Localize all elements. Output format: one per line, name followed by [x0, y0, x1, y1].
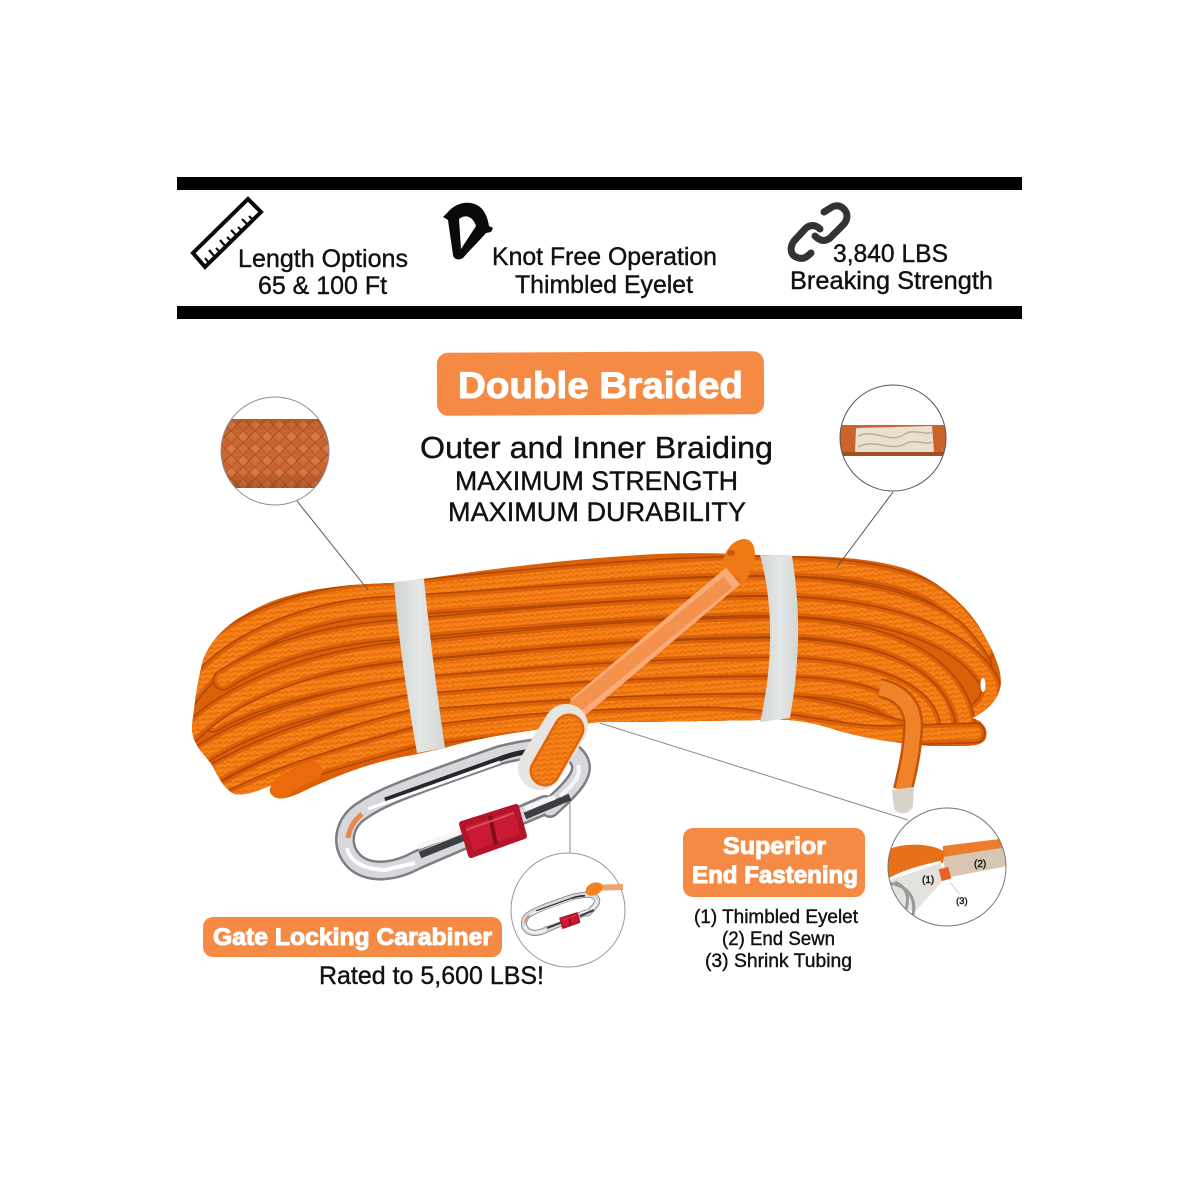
badge: double braided: Double Braided [458, 365, 743, 406]
bottom black bar [177, 306, 1022, 319]
text: braiding description: Outer and Inner Braiding [420, 430, 773, 465]
text: braiding description: MAXIMUM DURABILITY [448, 497, 746, 527]
text: end fastening list [694, 907, 859, 972]
top black bar [177, 177, 1022, 190]
text: braiding description [420, 430, 773, 527]
feature text: breaking strength [790, 240, 993, 295]
callout: end fastening close-up: (1) [922, 875, 934, 886]
icon: ruler [193, 199, 261, 267]
badge: gate locking carabiner [203, 917, 502, 957]
badge: superior end fastening: End Fastening [692, 862, 858, 889]
thimbled eyelet and rope end [540, 539, 755, 771]
rope coil [178, 553, 1001, 803]
feature text: breaking strength: 3,840 LBS [833, 240, 948, 268]
text: end fastening list: (1) Thimbled Eyelet [694, 907, 859, 928]
badge: superior end fastening: Superior [723, 833, 826, 860]
retaining band: right [760, 555, 798, 722]
icon: thimble [443, 203, 493, 259]
feature text: breaking strength: Breaking Strength [790, 267, 993, 295]
feature text: knot free: Knot Free Operation [492, 243, 717, 271]
rope tail with tip [880, 688, 914, 813]
leader line: carabiner [569, 785, 571, 853]
callout: outer braid [215, 397, 335, 505]
callout: carabiner close-up [511, 853, 625, 967]
feature text: length options: 65 & 100 Ft [258, 272, 387, 300]
text: end fastening list: (3) Shrink Tubing [705, 951, 852, 972]
feature text: knot free: Thimbled Eyelet [515, 271, 693, 299]
callout: end fastening close-up: (2) [974, 859, 986, 870]
badge: superior end fastening [683, 828, 865, 897]
badge: double braided [437, 351, 764, 416]
leader line: end fastening [600, 723, 908, 820]
leader line: outer braid [297, 501, 368, 590]
leader line: inner braid [837, 492, 893, 567]
text: end fastening list: (2) End Sewn [722, 929, 835, 950]
text: braiding description: MAXIMUM STRENGTH [455, 466, 738, 496]
callout: end fastening close-up: (3) [956, 896, 968, 907]
icon: chain link [791, 206, 847, 258]
carabiner [345, 748, 581, 870]
badge: gate locking carabiner: Gate Locking Carabiner [213, 924, 492, 951]
feature text: length options [238, 245, 408, 300]
feature text: length options: Length Options [238, 245, 408, 273]
text: carabiner rating: Rated to 5,600 LBS! [319, 962, 544, 990]
callout: end fastening close-up [888, 808, 1008, 926]
retaining band: left [394, 579, 445, 753]
callout: inner braid [838, 385, 948, 491]
infographic canvas [177, 177, 1022, 988]
feature text: knot free [492, 243, 717, 299]
